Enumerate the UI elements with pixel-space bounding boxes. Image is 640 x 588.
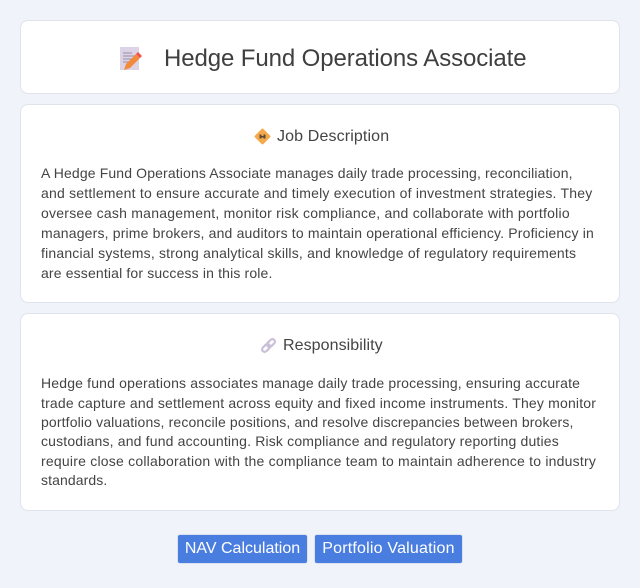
- heading: responsibility: Responsibility: [283, 337, 383, 354]
- tag: NAV Calculation: NAV Calculation: [185, 540, 300, 557]
- text: responsibility paragraph: custodians, and fund accounting. Risk compliance and regulatory reporting duties: [41, 433, 559, 449]
- text: responsibility paragraph: require close collaboration with the compliance team to maintain adherence to industry: [41, 453, 596, 469]
- text: job description paragraph: are essential for success in this role.: [41, 265, 273, 281]
- panel: title card: [20, 20, 620, 94]
- panel: responsibility: [20, 313, 620, 511]
- tag: NAV Calculation: [177, 534, 308, 564]
- tag: Portfolio Valuation: Portfolio Valuation: [322, 540, 455, 557]
- icon: construction diamond: [254, 128, 270, 144]
- text: responsibility paragraph: [41, 375, 596, 488]
- text: job description paragraph: managers, prime brokers, and auditors to maintain operational efficiency. Proficiency in: [41, 225, 594, 241]
- icon: link: [261, 338, 276, 353]
- heading: job description: Job Description: [277, 128, 389, 145]
- panel: job description: [20, 104, 620, 303]
- text: responsibility paragraph: Hedge fund operations associates manage daily trade processing, ensuring accurate: [41, 375, 580, 391]
- text: responsibility paragraph: trade capture and settlement across equity and fixed income instruments. They monitor: [41, 395, 596, 411]
- text: job description paragraph: financial systems, strong analytical skills, and knowledge of regulatory requirements: [41, 245, 576, 261]
- text: job description paragraph: and settlement to ensure accurate and timely execution of investment strategies. They: [41, 185, 592, 201]
- text: responsibility paragraph: portfolio valuations, reconcile positions, and resolve discrepancies between brokers,: [41, 414, 574, 430]
- title: Hedge Fund Operations Associate: [164, 45, 526, 72]
- text: job description paragraph: A Hedge Fund Operations Associate manages daily trade processing, reconciliation,: [41, 165, 573, 181]
- text: responsibility paragraph: standards.: [41, 472, 107, 488]
- text: job description paragraph: oversee cash management, monitor risk compliance, and collaborate with portfolio: [41, 205, 570, 221]
- text: job description paragraph: [41, 165, 594, 281]
- tag: Portfolio Valuation: [314, 534, 463, 564]
- icon: memo with pencil: [120, 47, 142, 70]
